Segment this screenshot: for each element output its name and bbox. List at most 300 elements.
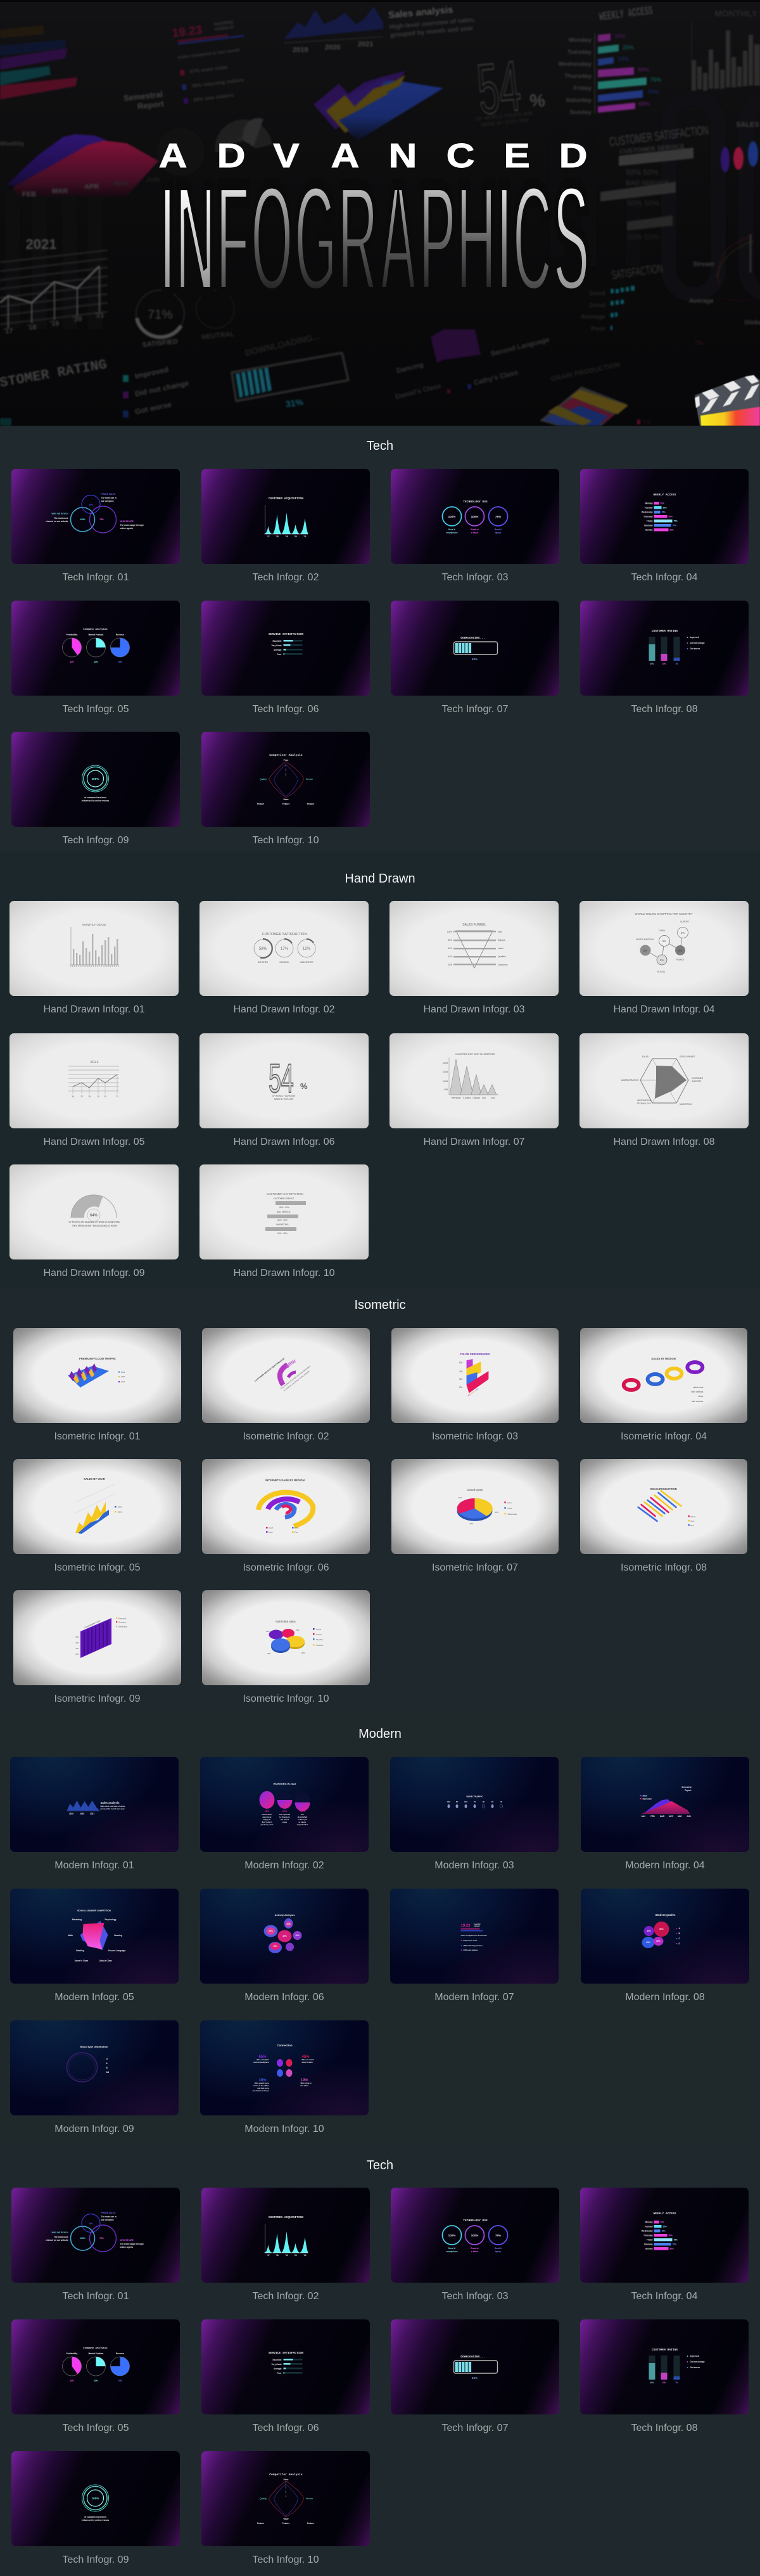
thumbnail: triangle chart: Venezuela	[452, 1097, 461, 1099]
caption: Tech Infogr. 05	[63, 2423, 129, 2433]
rating legend: Improved	[134, 365, 169, 381]
thumbnail: sales analysis: High-level overview of sales,	[100, 1805, 125, 1808]
customer satisfaction bars: BAD SERVICE	[626, 180, 669, 187]
thumbnail: hexagon radar: ADMINISTRATION	[621, 1079, 639, 1081]
thumbnail: workers ovals: 90%	[265, 1810, 270, 1813]
thumbnail: semestral report area: MAR	[660, 1815, 665, 1818]
thumbnail: learner radar: Marketing	[72, 1918, 82, 1921]
thumbnail: satisfaction rings: 58%	[259, 947, 267, 951]
thumbnail: user traffic row: 100	[447, 1801, 450, 1803]
thumbnail: nail polish blobs: Sky Blue	[316, 1638, 323, 1641]
thumbnail: customer rating columns: 7%	[675, 663, 678, 665]
panel: Isometric Infogr. 10	[202, 1590, 370, 1714]
thumbnail: 54 percent: 54	[269, 1055, 294, 1101]
stats block: 19.23	[172, 23, 203, 41]
caption: Modern Infogr. 09	[54, 2124, 134, 2134]
thumbnail: blood type ring: Blood type distribution	[80, 2045, 108, 2048]
customer satisfaction bars: 50% 50%	[627, 233, 660, 241]
54 percent: MADE BY EXPLORE	[481, 117, 529, 128]
thumbnail: competitor radar: Feature	[307, 803, 314, 805]
panel: Modern Infogr. 04	[581, 1757, 749, 1881]
thumbnail: semestral report area: Semestral	[681, 1786, 692, 1789]
thumbnail: blood type ring: B	[106, 2067, 108, 2069]
thumbnail: competitor radar: Competitor Analysis	[269, 753, 303, 757]
thumbnail: venn diagram: PHONE SALES	[101, 2212, 115, 2214]
panel: Hand Drawn Infogr. 08	[580, 1033, 749, 1147]
line chart 2021: 2021	[26, 236, 56, 252]
isometric chart	[314, 71, 443, 140]
caption: Tech Infogr. 05	[63, 704, 129, 715]
thumbnail: company pies	[11, 601, 180, 696]
thumbnail: company pies: Company Analysis	[83, 2347, 108, 2350]
thumbnail: triangle chart: Iran	[482, 1097, 486, 1099]
download bar: 31%	[285, 397, 304, 409]
panel: Hand Drawn Infogr. 10	[200, 1164, 369, 1278]
thumbnail: customer rating columns: Got worse	[690, 647, 700, 650]
thumbnail: venn diagram: WHO WE REACH	[51, 513, 68, 515]
thumbnail: sales funnel: 20%	[448, 964, 452, 966]
thumbnail: network nodes: FRANCE	[676, 959, 685, 961]
panel: Hand Drawn Infogr. 05	[10, 1033, 179, 1147]
thumbnail: cyan peaks chart: '18	[276, 2254, 279, 2257]
thumbnail: technology rings	[391, 469, 559, 564]
satisfaction rows: Average	[581, 314, 605, 321]
background dashboards: 7%	[694, 340, 704, 347]
weekly access chart: 10%	[614, 33, 626, 39]
caption: Modern Infogr. 07	[434, 1992, 514, 2003]
thumbnail: competitor radar: Price	[284, 759, 289, 762]
panel: Tech Infogr. 05	[11, 601, 180, 715]
satisfaction rows	[581, 262, 664, 333]
thumbnail: technology rings: a tablet	[471, 532, 479, 534]
caption: Tech Infogr. 01	[63, 2291, 129, 2302]
thumbnail: service satisfaction: SERVICE SATISFACTION	[269, 2351, 303, 2355]
heading: Tech: Tech	[367, 439, 393, 453]
thumbnail: competitor radar: Price	[284, 2478, 289, 2481]
thumbnail: semi gauge: OF PEOPLE SAY BUILDING OF WORK IS SOMETHING	[68, 1221, 120, 1223]
thumbnail: user traffic row: 40	[500, 1801, 502, 1803]
thumbnail: color preferences	[391, 1328, 559, 1423]
caption: Modern Infogr. 03	[434, 1860, 514, 1871]
thumbnail: weekly access bars: 25%	[662, 507, 667, 509]
caption: Tech Infogr. 07	[442, 2423, 508, 2433]
thumbnail: customer rating columns	[580, 601, 749, 696]
thumbnail: weekly access bars: 50%	[669, 2234, 673, 2236]
radar dim	[395, 329, 550, 401]
thumbnail: venn diagram: 30%	[89, 2222, 93, 2225]
weekly access chart: Monday	[569, 37, 592, 44]
thumbnail: triangle chart: 200B	[443, 1071, 448, 1073]
thumbnail: workers ovals: The workers	[262, 1813, 272, 1816]
thumbnail: weekly access bars: 70%	[673, 2243, 676, 2245]
thumbnail: triangle chart: S.Arabia	[463, 1097, 471, 1099]
panel: Tech Infogr. 09 (repeat)	[11, 2451, 180, 2575]
thumbnail: connection nodes: Who bring to	[300, 2082, 312, 2084]
caption: Modern Infogr. 05	[54, 1992, 134, 2003]
thumbnail: venn diagram: The most use in	[101, 497, 117, 499]
panel: Hand Drawn Infogr. 02	[200, 901, 369, 1015]
panel: Tech Infogr. 02 (repeat)	[201, 2188, 370, 2312]
thumbnail: hexagon radar: INFORMATION	[637, 1099, 652, 1102]
thumbnail: 54 percent: %	[300, 1081, 308, 1091]
thumbnail: technology rings: Rural w/	[471, 2247, 479, 2250]
weekly access chart: 60%	[638, 101, 650, 107]
thumbnail: connection nodes	[200, 2020, 369, 2115]
thumbnail: purple isometric columns: Distribution	[118, 1626, 127, 1628]
caption: Tech Infogr. 02	[253, 572, 319, 583]
thumbnail: color preferences: Blue	[475, 1387, 479, 1391]
thumbnail: learner radar: SCHOOL LEARNER COMPETITION	[77, 1910, 111, 1912]
thumbnail: workers ovals: or career	[299, 1821, 307, 1823]
thumbnail: network nodes: WORLD ONLINE SHOPPING PER COUNTRY	[635, 912, 693, 915]
grain production	[540, 361, 628, 426]
thumbnail: monthly visitors: visitors	[474, 1925, 480, 1927]
thumbnail: weekly access bars: 10%	[660, 2221, 664, 2224]
thumbnail: weekly access bars: 25%	[662, 2225, 667, 2228]
thumbnail: venn diagram: online agents	[120, 527, 133, 530]
thumbnail: satisfaction bars: 50% 50%	[277, 1219, 288, 1221]
thumbnail: cyan peaks chart: '20	[294, 535, 297, 538]
thumbnail: connection nodes: productive at home	[253, 2089, 269, 2092]
thumbnail: network nodes: 6%	[662, 940, 666, 943]
customer satisfaction bars: 50% 50%	[626, 168, 659, 177]
thumbnail: weekly access bars: Saturday	[644, 2243, 653, 2245]
thumbnail: network nodes: 5%	[643, 949, 647, 952]
thumbnail: customer rating columns: 60%	[650, 663, 654, 665]
thumbnail: nail polish blobs: Scarlet	[316, 1633, 322, 1636]
weekly access chart: Wednesday	[558, 61, 592, 68]
panel: Tech Infogr. 10	[201, 732, 370, 846]
thumbnail: closed deals pie: Direct	[507, 1502, 512, 1504]
caption: Tech Infogr. 01	[63, 572, 129, 583]
thumbnail: percentage rings: of customer have been	[84, 2516, 106, 2518]
caption: Isometric Infogr. 02	[243, 1431, 329, 1442]
thumbnail: technology rings	[391, 2188, 559, 2283]
satisfaction rows: SATISFACTION	[611, 262, 664, 283]
thumbnail: user traffic row: 60	[491, 1801, 493, 1803]
thumbnail: company pies	[11, 2319, 180, 2414]
thumbnail: cyan peaks chart	[201, 2188, 370, 2283]
thumbnail: cyan peaks chart: CUSTOMER ACQUISITION	[269, 2216, 303, 2219]
thumbnail: marketing bubbles: Activity Analysis	[275, 1913, 295, 1916]
panel: Modern Infogr. 09	[10, 2020, 179, 2145]
thumbnail: workers ovals: happy in	[263, 1818, 271, 1821]
thumbnail: customer rating columns: 7%	[675, 2382, 678, 2384]
thumbnail: student grades bubbles: Student grades	[656, 1913, 676, 1916]
heading: Modern: Modern	[358, 1727, 402, 1741]
thumbnail: hexagon radar: MARKETING	[680, 1103, 692, 1106]
thumbnail: cyan peaks chart: '17	[267, 2254, 270, 2257]
panel: Tech Infogr. 10 (repeat)	[201, 2451, 370, 2575]
thumbnail: nail polish blobs: Orchid	[316, 1628, 322, 1631]
thumbnail: network nodes: CHINA	[659, 929, 666, 932]
stats block	[171, 18, 251, 105]
dials	[156, 118, 272, 176]
thumbnail: connection nodes: 45%	[301, 2055, 310, 2059]
thumbnail: percentage rings	[11, 732, 180, 827]
blue area chart: 2021	[358, 41, 373, 48]
thumbnail: marketing bubbles: 25%	[269, 1930, 273, 1932]
caption: Isometric Infogr. 04	[621, 1431, 707, 1442]
panel: Isometric Infogr. 02	[202, 1328, 370, 1442]
stats block: visitors!	[214, 24, 234, 32]
thumbnail: isometric traffic chart: 2021	[121, 1380, 125, 1383]
thumbnail: weekly access bars: Friday	[647, 2239, 653, 2241]
thumbnail: technology rings: TECHNOLOGY USE	[463, 500, 488, 504]
caption: Isometric Infogr. 09	[54, 1693, 141, 1704]
thumbnail: service satisfaction: Poor	[277, 2372, 282, 2375]
thumbnail: hexagon radar	[580, 1033, 749, 1128]
thumbnail: technology rings: 100%	[448, 515, 455, 518]
thumbnail: cyan peaks chart: CUSTOMER ACQUISITION	[269, 497, 303, 501]
thumbnail: weekly access bars: Wednesday	[642, 511, 653, 513]
thumbnail: weekly access bars: 70%	[673, 525, 676, 527]
thumbnail: technology rings: 100%	[448, 2234, 455, 2237]
caption: Tech Infogr. 08	[631, 704, 697, 715]
thumbnail: satisfaction bars: CUSTOMER SERVICE	[273, 1197, 294, 1200]
weekly access chart: 25%	[623, 44, 634, 51]
thumbnail: grain production: Corn	[690, 1520, 695, 1522]
thumbnail: competitor radar: Service	[306, 778, 313, 781]
thumbnail: connection nodes: work at workplace	[253, 2061, 269, 2063]
thumbnail: service satisfaction	[201, 601, 370, 696]
thumbnail: venn diagram: The most usage through	[120, 524, 144, 526]
thumbnail: competitor radar: Feature	[282, 2522, 289, 2525]
panel: Tech Infogr. 09	[11, 732, 180, 846]
thumbnail: company pies: 75%	[118, 2380, 122, 2382]
caption: Hand Drawn Infogr. 07	[423, 1137, 525, 1147]
thumbnail: download progress: DOWNLOADING...	[460, 636, 485, 640]
thumbnail: technology rings: a tablet	[471, 2250, 479, 2253]
thumbnail: hexagon radar: SUPPORT	[692, 1080, 701, 1083]
thumbnail: sales funnel: 40%	[448, 955, 452, 958]
thumbnail: monthly visitors: 78% returning visitors	[464, 1944, 483, 1947]
panel: Isometric Infogr. 06	[202, 1459, 370, 1583]
weekly access chart: Thursday	[564, 73, 592, 80]
blue area chart: 2019	[293, 46, 308, 54]
area chart: FEB	[22, 191, 36, 198]
thumbnail: purple isometric columns: 200	[75, 1653, 79, 1655]
thumbnail: workers ovals: previous years	[261, 1823, 274, 1826]
thumbnail: satisfaction rings: 12%	[303, 947, 311, 951]
thumbnail: workers ovals: in their job	[298, 1818, 307, 1821]
thumbnail: competitor radar: Feature	[307, 2522, 314, 2525]
thumbnail: connection nodes: Who are aware	[301, 2058, 315, 2061]
thumbnail: student grades bubbles: A	[679, 1927, 680, 1930]
caption: Modern Infogr. 08	[625, 1992, 705, 2003]
thumbnail: 3d region rings: africa	[698, 1395, 703, 1398]
thumbnail: cyan peaks chart: '21	[303, 2254, 307, 2257]
satisfied ring	[136, 290, 184, 349]
thumbnail: internet usage arcs: South	[269, 1527, 274, 1529]
panel: Isometric Infogr. 03	[391, 1328, 559, 1442]
thumbnail: company pies: Revenue	[116, 2352, 124, 2355]
thumbnail: venn diagram: channel on our website	[46, 520, 68, 523]
thumbnail: semestral report area: Report	[685, 1789, 692, 1792]
stats block: 67% more visits	[189, 64, 229, 75]
thumbnail: closed deals pie: Video/Audio	[507, 1513, 517, 1515]
area chart: JUN	[146, 176, 160, 184]
thumbnail: nail polish blobs: Nail Polish Sales	[276, 1620, 296, 1623]
caption: Tech Infogr. 06	[253, 2423, 319, 2433]
blue area chart	[284, 6, 383, 54]
thumbnail: workers ovals: Are expected	[279, 1813, 291, 1816]
thumbnail: customer rating columns: CUSTOMER RATING	[652, 629, 678, 633]
grain production: GRAIN PRODUCTION	[550, 361, 621, 383]
thumbnail: line chart: '20	[104, 1095, 106, 1098]
thumbnail: isometric traffic chart	[13, 1328, 181, 1423]
neutral ring	[196, 290, 235, 341]
panel: Hand Drawn Infogr. 06	[200, 1033, 369, 1147]
panel: Isometric Infogr. 08	[580, 1459, 747, 1583]
satisfaction rows: Good	[589, 290, 605, 297]
thumbnail: company pies: 40%	[70, 2380, 74, 2382]
thumbnail: grain production	[580, 1459, 747, 1554]
thumbnail: network nodes: EUROPE	[680, 921, 689, 923]
thumbnail: internet usage arcs: INTERNET USAGE BY REGION	[265, 1479, 305, 1482]
thumbnail: workers ovals: WORKERS IN 2022	[273, 1782, 296, 1785]
thumbnail: company pies: Company Analysis	[83, 628, 108, 631]
panel: Modern Infogr. 08	[581, 1889, 749, 2013]
thumbnail: marketing bubbles	[200, 1889, 369, 1984]
thumbnail: company pies: Market Position	[89, 2352, 103, 2355]
thumbnail: satisfaction rings	[200, 901, 369, 996]
thumbnail: service satisfaction: Very Good	[272, 2363, 282, 2366]
grey column chart	[692, 30, 760, 91]
thumbnail: nail polish blobs: 35%	[267, 1652, 271, 1655]
thumbnail: competitor radar: Quality	[260, 2497, 267, 2500]
caption: Modern Infogr. 10	[244, 2124, 324, 2134]
thumbnail: venn diagram: channel on our website	[46, 2239, 68, 2241]
thumbnail: connection nodes: 19%	[300, 2079, 308, 2082]
caption: Tech Infogr. 03	[442, 2291, 508, 2302]
thumbnail: grain production: Rice	[690, 1524, 694, 1527]
caption: Tech Infogr. 04	[631, 572, 697, 583]
thumbnail: company pies: 25%	[94, 2380, 98, 2382]
thumbnail: technology rings: smartphone	[446, 532, 458, 534]
thumbnail: service satisfaction	[201, 2319, 370, 2414]
thumbnail: nail polish blobs: 20%	[266, 1630, 270, 1633]
panel: Tech Infogr. 08 (repeat)	[580, 2319, 749, 2444]
thumbnail: company pies: 75%	[118, 661, 122, 663]
thumbnail: triangle chart: Canada	[472, 1097, 480, 1099]
thumbnail: satisfaction rings: 17%	[281, 947, 289, 951]
right labels: Average	[689, 298, 714, 305]
thumbnail: connection nodes: Connection	[277, 2044, 293, 2047]
caption: Isometric Infogr. 08	[621, 1562, 707, 1573]
thumbnail: percentage rings: 100%	[92, 2497, 99, 2500]
thumbnail: technology rings: Rural &	[448, 528, 456, 531]
thumbnail: connection nodes: hours in the office	[253, 2084, 269, 2087]
panel: Isometric Infogr. 09	[13, 1590, 181, 1714]
semestral report text: Semestral	[123, 89, 163, 103]
thumbnail: monthly usage bars: MONTHLY USAGE	[82, 923, 106, 926]
panel: Modern Infogr. 07	[390, 1889, 559, 2013]
caption: Hand Drawn Infogr. 03	[423, 1004, 525, 1015]
thumbnail: workers ovals: opportunities	[297, 1823, 308, 1826]
thumbnail: color preferences: 200	[459, 1386, 462, 1389]
thumbnail: isometric arcs: in what we are doing on the website	[283, 1370, 310, 1392]
panel: Tech Infogr. 04 (repeat)	[580, 2188, 749, 2312]
thumbnail: venn diagram: WHO WE REACH	[51, 2231, 68, 2234]
thumbnail: download progress	[391, 601, 559, 696]
thumbnail: satisfaction bars: MARKETING	[277, 1223, 289, 1226]
thumbnail: closed deals pie: 30%	[459, 1496, 462, 1499]
area chart: Monthly	[0, 141, 25, 148]
thumbnail: purple isometric columns	[13, 1590, 181, 1685]
thumbnail: connection nodes: Who spend more	[255, 2082, 269, 2084]
panel: Hand Drawn Infogr. 07	[390, 1033, 559, 1147]
thumbnail: percentage rings: of customer have been	[84, 796, 106, 799]
thumbnail: weekly access bars: Saturday	[644, 525, 653, 527]
heading: Isometric: Isometric	[354, 1298, 406, 1312]
thumbnail: sales analysis: 2020	[80, 1813, 84, 1815]
thumbnail: percentage rings	[11, 2451, 180, 2546]
caption: Isometric Infogr. 06	[243, 1562, 329, 1573]
area chart: APR	[84, 183, 99, 191]
thumbnail: cyan peaks chart	[201, 469, 370, 564]
panel: Modern Infogr. 06	[200, 1889, 369, 2013]
thumbnail: venn diagram: The most use in	[101, 2216, 117, 2218]
weekly access chart: Sunday	[570, 109, 592, 116]
thumbnail: technology rings: 100%	[471, 515, 478, 518]
thumbnail: sales analysis: 2021	[90, 1813, 94, 1815]
thumbnail: download progress: DOWNLOADING...	[460, 2355, 485, 2359]
thumbnail: hexagon radar: CUSTOMER	[692, 1077, 704, 1080]
right labels	[689, 261, 760, 326]
thumbnail: closed deals pie: 40%	[495, 1511, 498, 1514]
thumbnail: user traffic row: 150	[464, 1801, 467, 1803]
thumbnail: sales funnel: Qualified	[498, 955, 506, 958]
thumbnail: user traffic row: 50	[456, 1801, 458, 1803]
thumbnail: sales funnel: 80%	[448, 939, 452, 941]
panel: Modern Infogr. 03	[390, 1757, 559, 1881]
thumbnail: service satisfaction: SERVICE SATISFACTION	[269, 632, 303, 636]
sales analysis text: Sales analysis	[388, 4, 453, 21]
panel: Modern Infogr. 05	[10, 1889, 179, 2013]
thumbnail: network nodes	[580, 901, 749, 996]
download bar: DOWNLOADING...	[244, 331, 320, 358]
thumbnail: sales by year: 2020	[118, 1505, 122, 1508]
caption: Modern Infogr. 02	[244, 1860, 324, 1871]
thumbnail: semestral report area: Semester	[642, 1798, 652, 1801]
thumbnail: workers ovals: Are	[301, 1813, 304, 1816]
thumbnail: learner radar: Second Language	[108, 1949, 125, 1952]
thumbnail: marketing bubbles: 10%	[295, 1934, 300, 1937]
thumbnail: connection nodes: 39%	[258, 2079, 267, 2082]
panel: Tech Infogr. 03	[391, 469, 559, 583]
panel: Tech Infogr. 03 (repeat)	[391, 2188, 559, 2312]
thumbnail: connection nodes: and feel more	[257, 2087, 269, 2089]
line chart 2021	[0, 236, 108, 335]
thumbnail: isometric arcs: CUSTOMER SERVICE PERFORMANCE	[254, 1357, 285, 1382]
thumbnail: blood type ring: A	[106, 2062, 108, 2065]
title: ADVANCED: ADVANCED	[159, 137, 587, 175]
thumbnail: weekly access bars: WEEKLY ACCESS	[654, 2212, 676, 2216]
thumbnail: percentage rings: 100%	[92, 777, 99, 781]
thumbnail: sales by year	[13, 1459, 181, 1554]
thumbnail: venn diagram: PHONE SALES	[101, 493, 115, 495]
panel: Hand Drawn Infogr. 01	[10, 901, 179, 1015]
thumbnail: weekly access bars	[580, 2188, 749, 2283]
thumbnail: connection nodes: Who complete	[256, 2058, 269, 2061]
thumbnail: satisfaction bars: CUSTOMER SATISFACTION	[267, 1192, 303, 1196]
thumbnail: student grades bubbles: B	[679, 1932, 680, 1935]
weekly access chart: Saturday	[566, 97, 592, 104]
thumbnail: purple isometric columns: 300	[75, 1647, 79, 1650]
54 percent: OF WORLD TOURS ARE	[475, 110, 533, 122]
thumbnail: purple isometric columns: 500	[75, 1636, 79, 1638]
